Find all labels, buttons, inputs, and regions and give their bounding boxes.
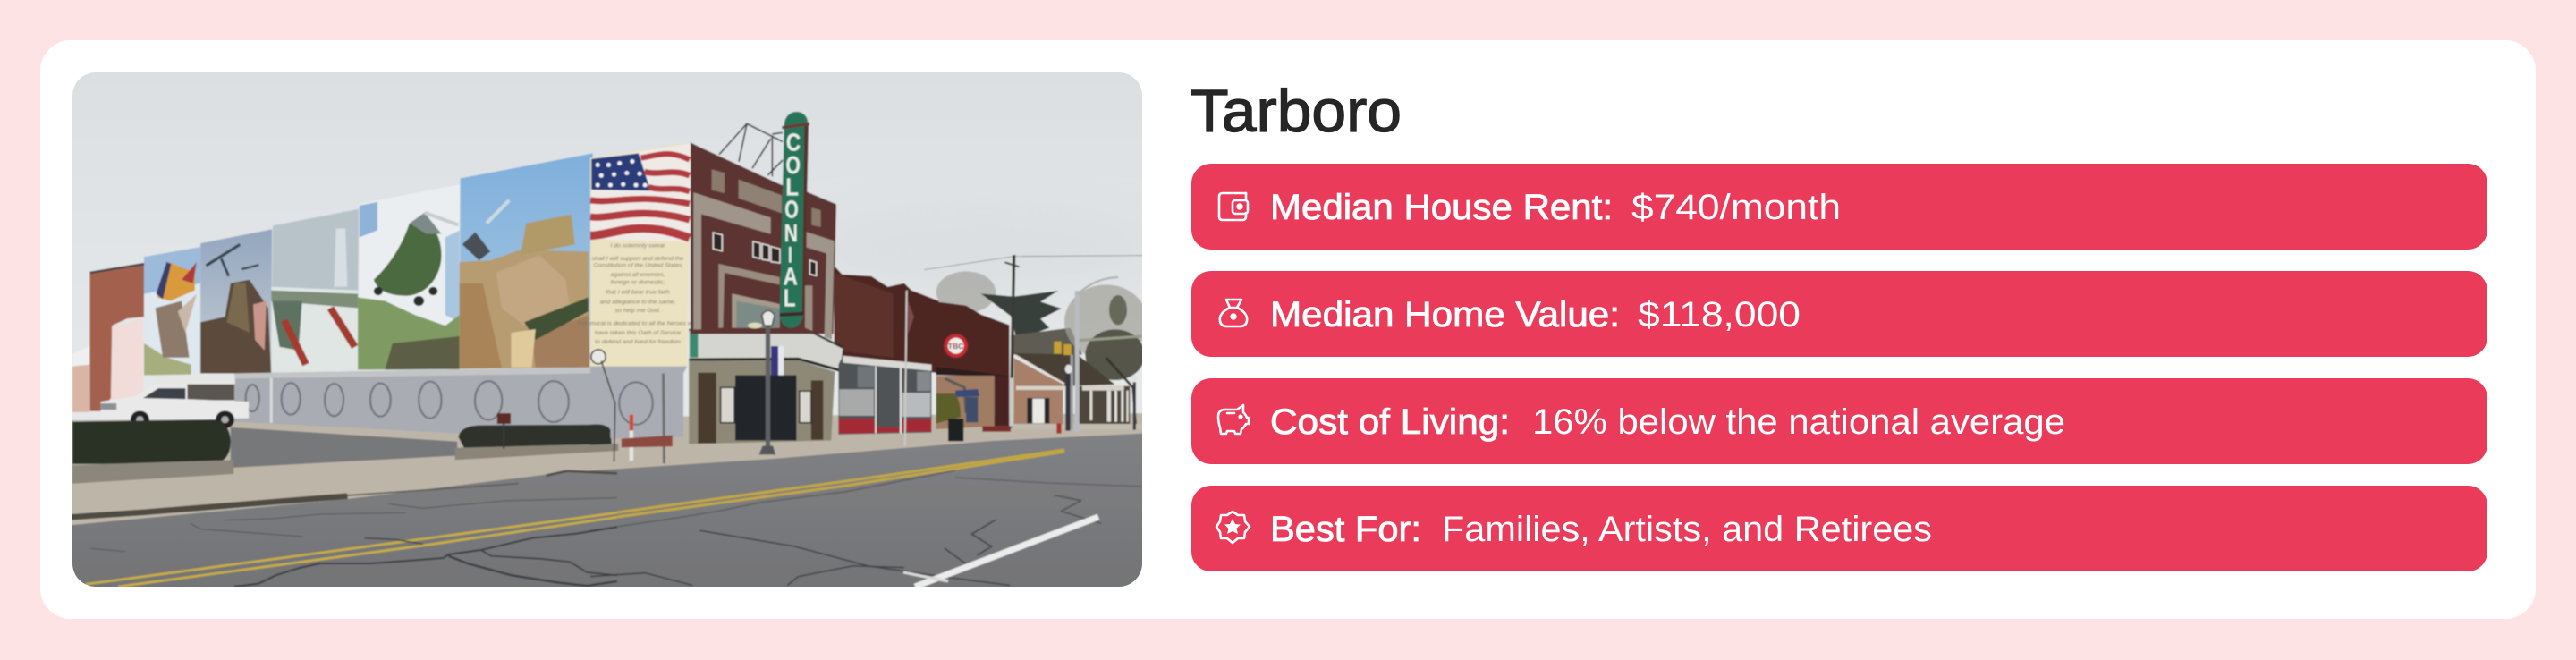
- lamp post with banner: [758, 310, 784, 454]
- value: rent: $740/month: [1631, 188, 1841, 227]
- oath inscription: to defend and lived for freedom: [595, 339, 681, 345]
- oath inscription: Constitution of the United States: [593, 263, 682, 269]
- COLONIAL sign: O: [784, 196, 799, 224]
- wall with service seals: [233, 372, 591, 434]
- icon: wallet: [1219, 193, 1248, 220]
- icon: money bag: [1220, 300, 1247, 326]
- COLONIAL sign: N: [784, 220, 798, 248]
- value: cost of living: 16% below the national average: [1532, 402, 2065, 442]
- house at left edge: [72, 364, 90, 413]
- lower road cracks: [590, 470, 1142, 585]
- mural 4: [360, 185, 460, 317]
- COLONIAL sign: L: [785, 172, 799, 201]
- pickup truck: [101, 376, 249, 428]
- mural 2: [200, 229, 272, 373]
- storefront: [838, 356, 931, 435]
- oath inscription: foreign or domestic;: [611, 280, 665, 286]
- label: median house rent: Median House Rent:: [1270, 188, 1613, 227]
- oath inscription: This mural is dedicated to all the heroes who: [577, 320, 699, 326]
- label: cost of living: Cost of Living:: [1270, 402, 1510, 442]
- COLONIAL sign: L: [784, 284, 796, 312]
- photo: Colonial Theatre street scene: [63, 63, 1181, 599]
- label: median home value: Median Home Value:: [1270, 295, 1620, 334]
- marquee: [689, 329, 843, 370]
- COLONIAL sign: O: [785, 152, 801, 180]
- oath inscription: against all enemies,: [610, 272, 665, 278]
- icon: star badge: [1216, 512, 1250, 543]
- flagpole: [905, 291, 907, 445]
- value: best for: Families, Artists, and Retirees: [1442, 510, 1932, 549]
- title: Tarboro: [1191, 78, 1402, 145]
- oath inscription: [577, 243, 699, 345]
- row: median house rent: [1191, 164, 2487, 250]
- hedges and planters: [72, 419, 231, 464]
- rooftop frame: [719, 123, 783, 176]
- mural 5: [460, 153, 593, 368]
- COLONIAL sign: [780, 112, 809, 328]
- signal and street lights: [1075, 291, 1080, 432]
- adjacent brick building: [835, 266, 939, 373]
- oath inscription: shall I will support and defend the: [592, 256, 684, 262]
- right building group with Colonial theatre base: [577, 143, 1142, 585]
- sidewalk and ground: [63, 413, 1154, 528]
- COLONIAL sign: C: [786, 129, 801, 157]
- row: best for: [1191, 486, 2487, 571]
- flower basket on marquee: [748, 323, 762, 328]
- value: home value: $118,000: [1638, 295, 1801, 334]
- mural roof caps: [89, 264, 144, 273]
- icon: piggy bank: [1218, 405, 1249, 434]
- COLONIAL sign: I: [788, 242, 792, 267]
- TBC round sign: [944, 334, 968, 358]
- TBC round sign: TBC: [948, 342, 964, 351]
- mural 3: [272, 209, 360, 292]
- brick tower: [691, 142, 836, 334]
- row: median home value: [1191, 271, 2487, 357]
- mural 1: [145, 295, 146, 296]
- theatre tower and vertical sign: [691, 112, 836, 340]
- oath inscription: that I will bear true faith: [606, 290, 670, 296]
- brown brick bank: [936, 301, 1009, 377]
- label: best for: Best For:: [1270, 510, 1421, 549]
- road: [63, 433, 1154, 599]
- brick end wall: [89, 265, 144, 411]
- COLONIAL sign: A: [784, 263, 798, 291]
- oath inscription: have taken this Oath of Service: [595, 330, 681, 336]
- right end of street: [924, 255, 1148, 441]
- yellow line continuation and crosswalk stripe: [617, 450, 1098, 587]
- left building group with murals: [72, 153, 618, 484]
- parking lot: [231, 427, 457, 468]
- row: cost of living: [1191, 378, 2487, 464]
- oath inscription: I do solemnly swear: [610, 243, 665, 249]
- sapling and signs: [601, 361, 664, 463]
- brick bank house: [1013, 353, 1115, 386]
- mural flag wall: [590, 143, 691, 368]
- trees: [936, 271, 996, 313]
- theatre ground floor: [689, 360, 835, 444]
- oath inscription: so help me God.: [615, 308, 661, 314]
- oath inscription: and allegiance to the same,: [600, 300, 675, 306]
- wires and utility pole: [924, 256, 1145, 270]
- curb, road markings and cracks: [71, 471, 617, 587]
